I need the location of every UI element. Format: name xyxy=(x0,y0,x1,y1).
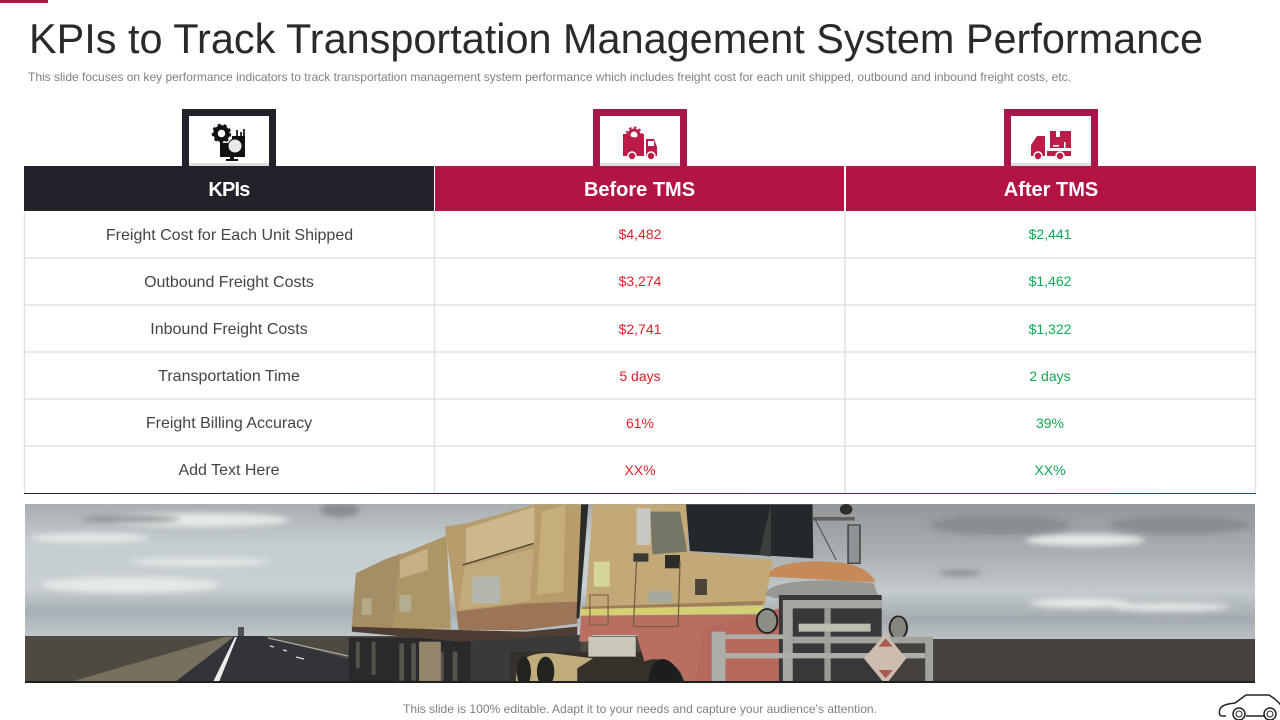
subtitle: This slide focuses on key performance indicators to track transportation management system performance which includes freight cost for each unit shipped, outbound and inbound freight costs, etc. xyxy=(28,70,1071,84)
row label: billing accuracy: Freight Billing Accuracy xyxy=(146,415,312,432)
value after: $1,322 xyxy=(1029,321,1071,337)
logos xyxy=(472,577,500,603)
value after: 2 days xyxy=(1029,368,1071,384)
cab pink lower xyxy=(579,614,763,681)
windshield xyxy=(686,504,813,558)
front wheel arches xyxy=(516,653,593,681)
row label: add text: Add Text Here xyxy=(178,462,280,479)
trailer main xyxy=(445,504,588,630)
trailer 4 xyxy=(352,553,401,628)
header: KPIs xyxy=(24,166,434,211)
header: After TMS: After TMS xyxy=(1004,179,1098,201)
headlights xyxy=(757,609,777,633)
row label: inbound: Inbound Freight Costs xyxy=(150,321,308,338)
truck xyxy=(349,504,933,687)
value after: $1,462 xyxy=(1029,273,1071,289)
icon: delivery truck with boxes xyxy=(1004,109,1098,166)
sign and door xyxy=(594,562,610,587)
header: KPIs: KPIs xyxy=(208,179,250,201)
icon: truck with gear xyxy=(593,109,687,166)
value before: $3,274 xyxy=(619,273,661,289)
footer note: This slide is 100% editable. Adapt it to your needs and capture your audience's attention. xyxy=(403,702,877,716)
photo bottom edge xyxy=(25,681,1255,683)
table: KPIs before and after TMS xyxy=(24,166,1256,494)
value after: XX% xyxy=(1034,462,1066,478)
value before: 61% xyxy=(626,415,654,431)
header: Before TMS xyxy=(435,166,844,211)
yellow stripe xyxy=(580,606,763,616)
value after: 39% xyxy=(1036,415,1064,431)
header: Before TMS: Before TMS xyxy=(584,179,695,201)
icon: monitor with gear and clock xyxy=(182,109,276,166)
value before: 5 days xyxy=(619,368,661,384)
value after: $2,441 xyxy=(1029,226,1071,242)
table grid xyxy=(24,211,1256,494)
row label: transportation time: Transportation Time xyxy=(158,368,300,385)
wheels xyxy=(349,638,475,681)
header: After TMS xyxy=(846,166,1256,211)
side window xyxy=(650,512,687,554)
ground xyxy=(25,636,665,682)
diamond sign xyxy=(864,633,906,685)
value before: $4,482 xyxy=(619,226,661,242)
hood xyxy=(769,561,876,582)
title: KPIs to Track Transportation Management System Performance xyxy=(29,15,1203,62)
grille xyxy=(779,595,882,681)
top accent bar xyxy=(0,0,48,3)
icon: car outline xyxy=(1218,694,1280,720)
sky xyxy=(25,504,675,638)
grass verge xyxy=(70,637,240,682)
row label: outbound: Outbound Freight Costs xyxy=(144,274,314,291)
road xyxy=(175,636,360,682)
chassis xyxy=(352,627,577,642)
mirror xyxy=(813,518,854,560)
bull bar xyxy=(712,632,925,681)
trailer 3 xyxy=(393,536,451,630)
value before: XX% xyxy=(624,462,656,478)
value before: $2,741 xyxy=(619,321,661,337)
cab tan xyxy=(585,504,773,609)
row label: freight cost per unit: Freight Cost for Each Unit Shipped xyxy=(106,227,353,244)
distant truck xyxy=(238,627,244,636)
photo: road train truck on highway xyxy=(25,504,1255,683)
